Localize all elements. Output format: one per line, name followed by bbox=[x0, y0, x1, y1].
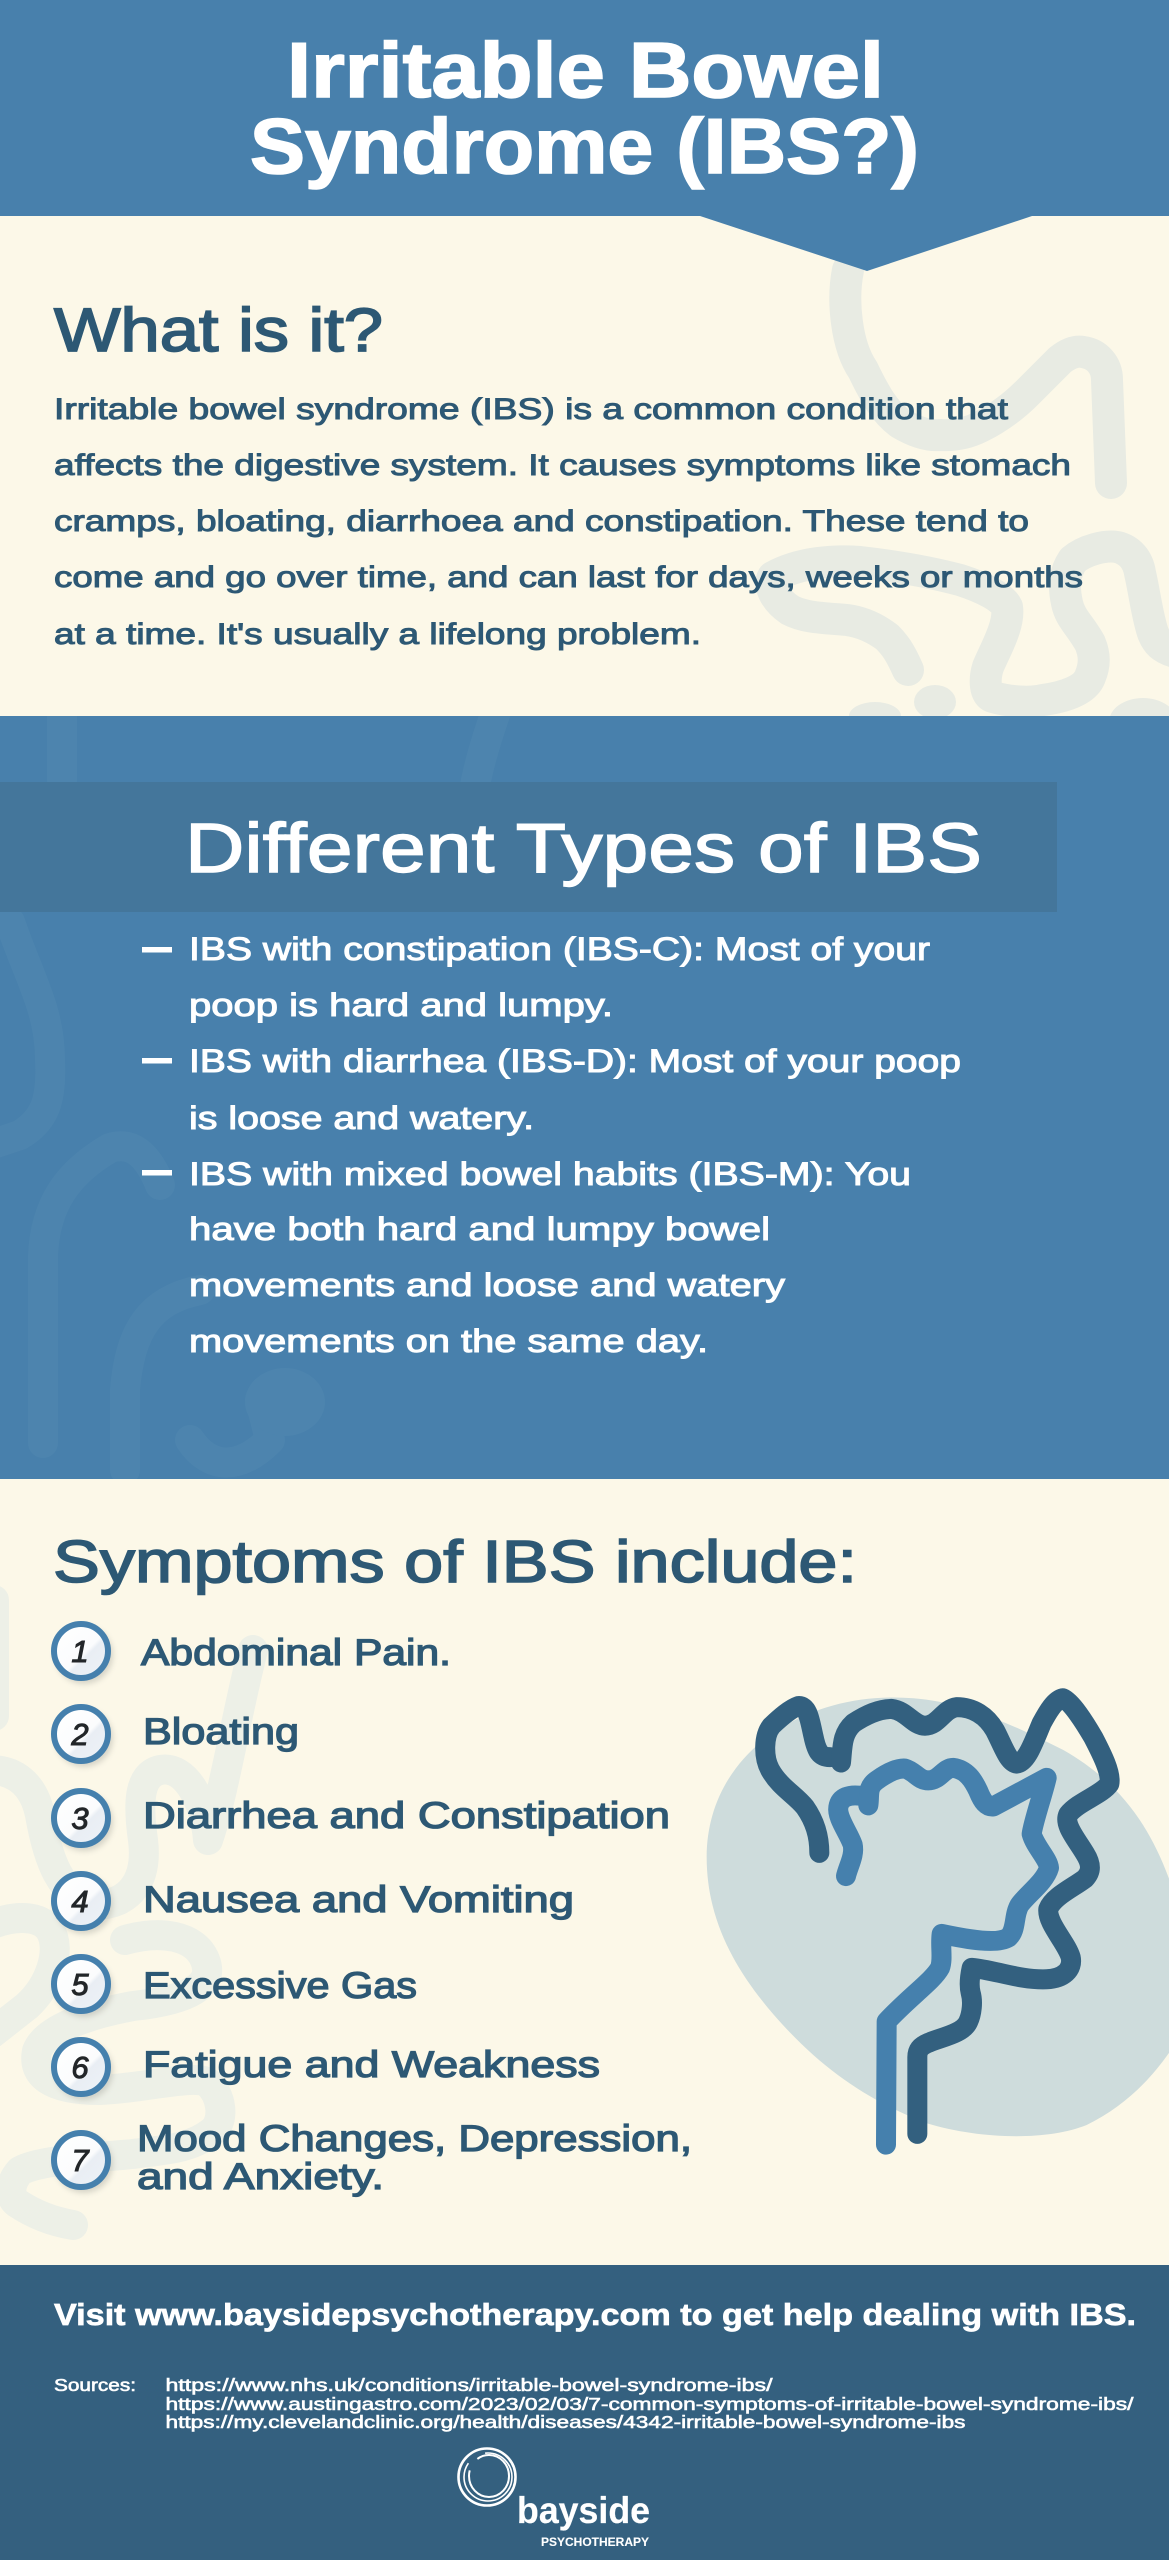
text block: definition of IBS bbox=[54, 393, 1083, 651]
badge 5: 5 bbox=[71, 1967, 89, 2002]
heading: symptoms: Symptoms of IBS include: bbox=[53, 1529, 857, 1595]
illustration: intestines bbox=[707, 1697, 1169, 2145]
badge 1 bbox=[54, 1624, 113, 1684]
sources: https://www.nhs.uk/conditions/irritable-bowel-syndrome-ibs/ bbox=[166, 2375, 773, 2395]
badge 4 bbox=[54, 1874, 113, 1934]
panel: header banner bbox=[0, 0, 1169, 271]
list: types of IBS: movements and loose and watery bbox=[189, 1267, 785, 1303]
title bbox=[250, 26, 919, 190]
panel: footer bbox=[0, 2265, 1169, 2560]
text block: definition of IBS: cramps, bloating, diarrhoea and constipation. These tend to bbox=[54, 505, 1029, 538]
badge 4: 4 bbox=[71, 1884, 89, 1919]
call to action: Visit www.baysidepsychotherapy.com to get help dealing with IBS. bbox=[54, 2297, 1136, 2332]
badge 1: 1 bbox=[71, 1634, 89, 1669]
badge 3: 3 bbox=[71, 1801, 89, 1836]
list: numbered symptoms bbox=[54, 1624, 692, 2197]
sources bbox=[54, 2375, 1134, 2432]
panel: different types of IBS background bbox=[0, 690, 1169, 1479]
panel: symptoms background bbox=[0, 1479, 1169, 2265]
list: types of IBS: is loose and watery. bbox=[189, 1100, 534, 1136]
heading band: different types of IBS: Different Types of IBS bbox=[185, 809, 982, 887]
symptom 6: Fatigue and Weakness bbox=[143, 2044, 600, 2085]
badge 2 bbox=[54, 1707, 113, 1767]
logo: bayside psychotherapy bbox=[458, 2448, 650, 2549]
symptom 2: Bloating bbox=[143, 1711, 299, 1752]
logo: bayside psychotherapy: PSYCHOTHERAPY bbox=[541, 2535, 649, 2549]
sources: Sources: bbox=[54, 2375, 136, 2395]
badge 5 bbox=[54, 1957, 113, 2017]
text block: definition of IBS: at a time. It's usually a lifelong problem. bbox=[54, 618, 701, 651]
logo: bayside psychotherapy: bayside bbox=[517, 2490, 650, 2531]
symptom 5: Excessive Gas bbox=[143, 1965, 417, 2006]
sources: https://www.austingastro.com/2023/02/03/7-common-symptoms-of-irritable-bowel-syndrome-ibs/ bbox=[166, 2394, 1134, 2414]
list: types of IBS: IBS with mixed bowel habits (IBS-M): You bbox=[189, 1156, 911, 1192]
symptom 7 bbox=[137, 2118, 692, 2197]
badge 2: 2 bbox=[70, 1717, 89, 1752]
symptom 1: Abdominal Pain. bbox=[141, 1632, 451, 1673]
text block: definition of IBS: Irritable bowel syndrome (IBS) is a common condition that bbox=[54, 393, 1009, 426]
heading: what is it: What is it? bbox=[54, 296, 383, 364]
list: types of IBS: movements on the same day. bbox=[189, 1323, 708, 1359]
badge 3 bbox=[54, 1791, 113, 1851]
sources: https://my.clevelandclinic.org/health/diseases/4342-irritable-bowel-syndrome-ibs bbox=[166, 2412, 966, 2432]
list: types of IBS bbox=[142, 931, 961, 1359]
symptom 4: Nausea and Vomiting bbox=[143, 1879, 574, 1920]
list: types of IBS: poop is hard and lumpy. bbox=[189, 987, 613, 1023]
symptom 3: Diarrhea and Constipation bbox=[143, 1795, 670, 1836]
text block: definition of IBS: come and go over time, and can last for days, weeks or months bbox=[54, 561, 1083, 594]
list: types of IBS: have both hard and lumpy bowel bbox=[189, 1211, 770, 1247]
text block: definition of IBS: affects the digestive system. It causes symptoms like stomach bbox=[54, 449, 1071, 482]
symptom 7: Mood Changes, Depression, bbox=[137, 2118, 692, 2159]
list: types of IBS: IBS with constipation (IBS-C): Most of your bbox=[189, 931, 930, 967]
heading band: different types of IBS bbox=[0, 782, 1057, 912]
symptom 7: and Anxiety. bbox=[137, 2156, 384, 2197]
panel: what is it background bbox=[0, 216, 1169, 746]
title: Irritable Bowel bbox=[287, 26, 884, 114]
title: Syndrome (IBS?) bbox=[250, 102, 919, 190]
badge 7: 7 bbox=[71, 2143, 90, 2178]
badge 7 bbox=[54, 2133, 113, 2193]
list: types of IBS: IBS with diarrhea (IBS-D): Most of your poop bbox=[189, 1043, 961, 1079]
badge 6: 6 bbox=[71, 2050, 89, 2085]
badge 6 bbox=[54, 2040, 113, 2100]
